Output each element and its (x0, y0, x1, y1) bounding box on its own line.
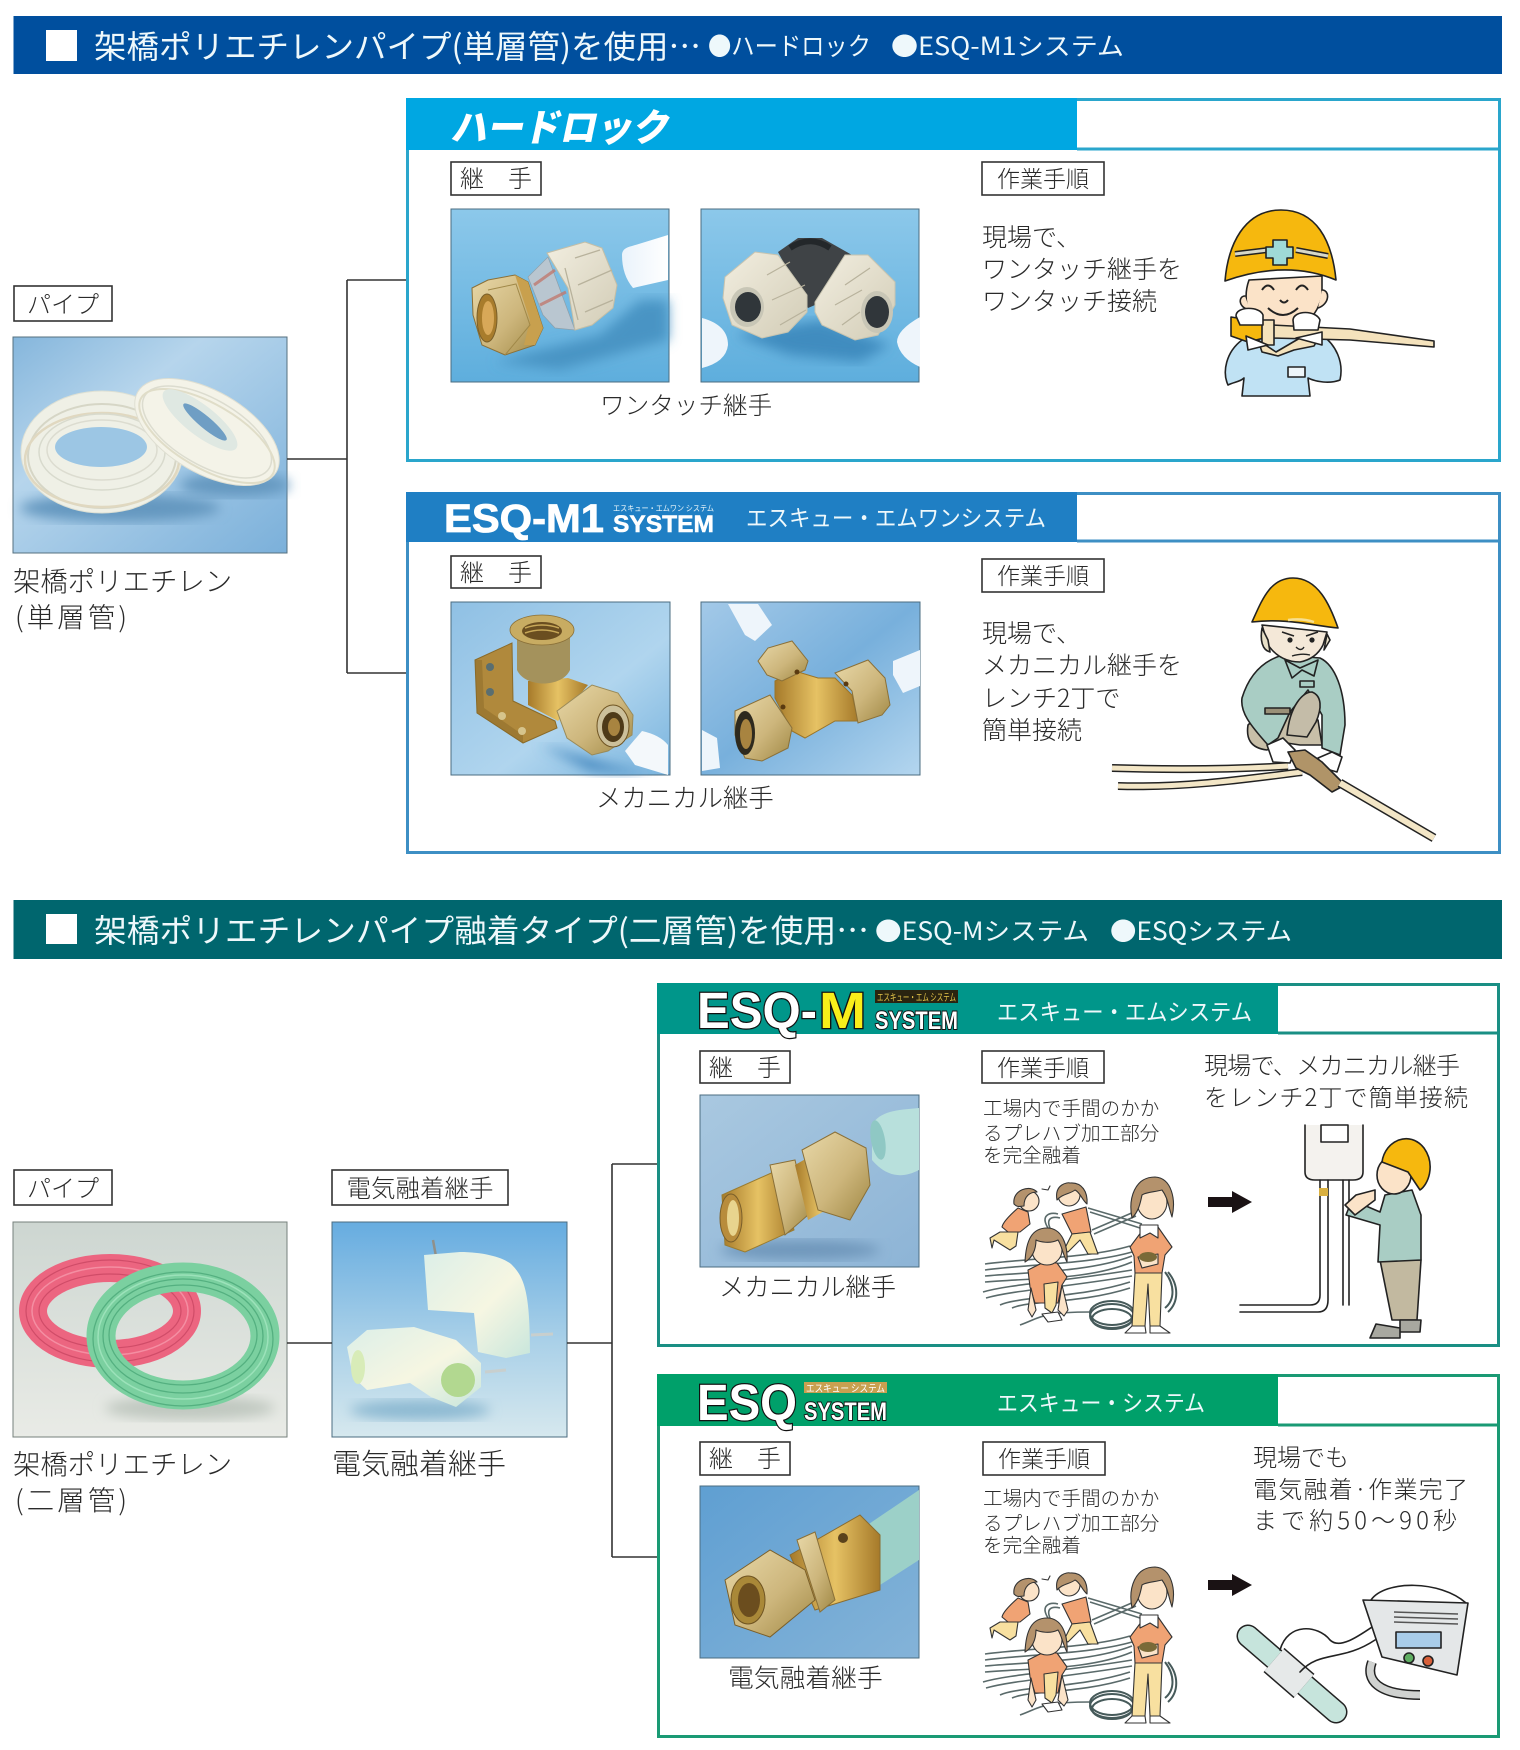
text: factory prefab description: を完全融着 (983, 1139, 1081, 1168)
header: ESQ-M1 logo band: SYSTEM (613, 511, 714, 538)
section banner: single-layer pipe: 架橋ポリエチレンパイプ(単層管)を使用… (94, 22, 701, 68)
header: ESQ-M1 logo band (406, 492, 1500, 542)
text: factory prefab description: 工場内で手間のかか (983, 1482, 1159, 1511)
photo: electrofusion brass fitting (700, 1486, 919, 1658)
label: joint: 継 手 (709, 1048, 781, 1083)
text: site connection description: 現場で、メカニカル継手 (1204, 1046, 1460, 1081)
illustration: crouching worker with wrenches (1112, 578, 1434, 838)
text: procedure description: 簡単接続 (982, 711, 1082, 747)
header: ESQ logo band: SYSTEM (804, 1398, 887, 1426)
label: joint: 継 手 (460, 159, 532, 194)
section banner: double-layer pipe (14, 900, 1502, 959)
text: site fusion description: 電気融着·作業完了 (1253, 1470, 1468, 1505)
text: procedure description (982, 218, 1182, 318)
caption: electrofusion fitting: 電気融着継手 (332, 1441, 506, 1483)
text: site connection description (1204, 1046, 1468, 1113)
caption: pipe type (13, 559, 232, 635)
header: ESQ logo band: エスキュー システム (806, 1380, 885, 1395)
illustration: factory workers (983, 1177, 1176, 1333)
header: ESQ-M1 logo band: エスキュー・エムワン システム (613, 503, 714, 514)
caption: one-touch fitting: ワンタッチ継手 (600, 386, 772, 422)
text: factory prefab description (983, 1482, 1159, 1558)
photo: red and green pipe coils (13, 1222, 287, 1437)
header: ESQ-M logo band: ESQ- (697, 982, 817, 1039)
panel: ESQ-M1 system (406, 492, 1500, 852)
electrofusion fitting label: 電気融着継手 (346, 1170, 494, 1205)
panel: Hard Lock (406, 97, 1500, 461)
text: factory prefab description: 工場内で手間のかか (983, 1092, 1159, 1121)
text: factory prefab description (983, 1092, 1159, 1168)
caption: mechanical fitting: メカニカル継手 (596, 779, 774, 815)
connector lines: upper tree (287, 280, 406, 673)
header: Hard Lock logo band (406, 97, 1500, 153)
text: procedure description: 現場で、 (982, 614, 1081, 650)
section banner: single-layer pipe: ●ESQ-M1システム (891, 27, 1124, 63)
text: procedure description: ワンタッチ接続 (982, 282, 1157, 318)
photo: mechanical brass fitting (700, 1095, 919, 1267)
illustration: factory workers (983, 1567, 1176, 1723)
photo: white cross-linked pipe coils (13, 337, 297, 553)
text: procedure description (982, 614, 1182, 747)
text: site fusion description (1253, 1438, 1468, 1536)
header: ESQ logo band: エスキュー・システム (997, 1384, 1205, 1418)
text: procedure description: ワンタッチ継手を (982, 250, 1182, 286)
text: site connection description: をレンチ2丁で簡単接続 (1204, 1078, 1468, 1113)
header: ESQ logo band: ESQ (697, 1374, 797, 1431)
caption: double-layer pipe: 架橋ポリエチレン (13, 1442, 232, 1482)
section banner: double-layer pipe: 架橋ポリエチレンパイプ融着タイプ(二層管)を使用… (94, 906, 869, 952)
photo: mechanical tee fitting (701, 602, 920, 775)
text: site fusion description: まで約50～90秒 (1253, 1501, 1457, 1536)
header: Hard Lock logo band: ハードロック (447, 97, 677, 153)
header: ESQ-M logo band: M (819, 982, 866, 1039)
caption: pipe type: (単層管) (15, 595, 127, 635)
label: work procedure: 作業手順 (998, 1440, 1090, 1474)
header: ESQ logo band (657, 1374, 1500, 1431)
section banner: single-layer pipe (14, 16, 1502, 74)
panel: ESQ-M system (657, 982, 1500, 1346)
illustration: worker joining pipe (1225, 210, 1434, 396)
photo: electrofusion elbows (332, 1222, 567, 1437)
text: procedure description: レンチ2丁で (982, 679, 1120, 715)
caption: electrofusion fitting: 電気融着継手 (728, 1658, 883, 1695)
caption: double-layer pipe: (二層管) (15, 1478, 127, 1518)
header: ESQ-M logo band: SYSTEM (875, 1007, 958, 1035)
illustration: worker connecting water heater (1240, 1125, 1430, 1338)
connector lines: lower tree (287, 1164, 657, 1557)
text: procedure description: 現場で、 (982, 218, 1081, 254)
text: factory prefab description: るプレハブ加工部分 (983, 1507, 1159, 1536)
text: site fusion description: 現場でも (1253, 1438, 1349, 1473)
header: ESQ-M1 logo band: エスキュー・エムワンシステム (746, 499, 1046, 533)
text: procedure description: メカニカル継手を (982, 646, 1182, 682)
pipe label: パイプ (27, 285, 99, 320)
photo: one-touch fitting straight (451, 209, 669, 382)
label: joint: 継 手 (460, 553, 532, 588)
label: work procedure: 作業手順 (997, 160, 1089, 194)
arrow (1208, 1191, 1252, 1213)
caption: pipe type: 架橋ポリエチレン (13, 559, 232, 599)
caption: mechanical fitting: メカニカル継手 (719, 1268, 896, 1304)
panel: ESQ system (657, 1374, 1500, 1736)
section banner: double-layer pipe: ●ESQシステム (1110, 912, 1292, 948)
text: factory prefab description: るプレハブ加工部分 (983, 1117, 1159, 1146)
photo: mechanical fitting with bracket (451, 602, 670, 775)
label: work procedure: 作業手順 (997, 557, 1089, 591)
label: work procedure: 作業手順 (997, 1049, 1089, 1083)
header: ESQ-M logo band (657, 982, 1500, 1039)
section banner: double-layer pipe: ●ESQ-Mシステム (875, 912, 1089, 948)
text: factory prefab description: を完全融着 (983, 1529, 1081, 1558)
header: ESQ-M logo band: エスキュー・エム システム (877, 989, 956, 1004)
arrow (1208, 1574, 1252, 1596)
illustration: fusion controller and pipe (1248, 1585, 1468, 1712)
header: ESQ-M logo band: エスキュー・エムシステム (997, 993, 1252, 1027)
label: joint: 継 手 (709, 1439, 781, 1474)
section banner: single-layer pipe: ●ハードロック (708, 27, 871, 63)
header: ESQ-M1 logo band: ESQ-M1 (444, 497, 604, 541)
caption: double-layer pipe (13, 1442, 232, 1518)
pipe label: パイプ (27, 1169, 99, 1204)
photo: one-touch fitting elbow (701, 209, 920, 382)
